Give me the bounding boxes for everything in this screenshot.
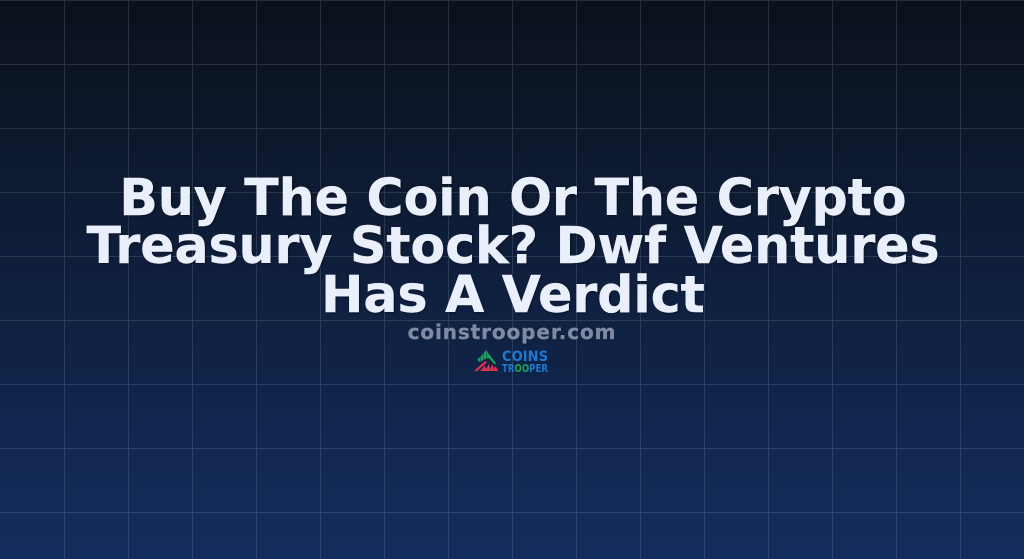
title: Buy The Coin Or The Crypto — [119, 168, 907, 226]
title — [86, 168, 940, 324]
logo wordmark: TROOPER — [502, 363, 548, 375]
logo wordmark — [502, 349, 548, 375]
icon: green and red chart peaks — [474, 350, 498, 371]
site url: coinstrooper.com — [408, 320, 616, 344]
title: Treasury Stock? Dwf Ventures — [86, 216, 940, 275]
logo wordmark: COINS — [502, 349, 548, 365]
logo: Coins Trooper — [474, 349, 548, 375]
title: Has A Verdict — [321, 264, 705, 324]
